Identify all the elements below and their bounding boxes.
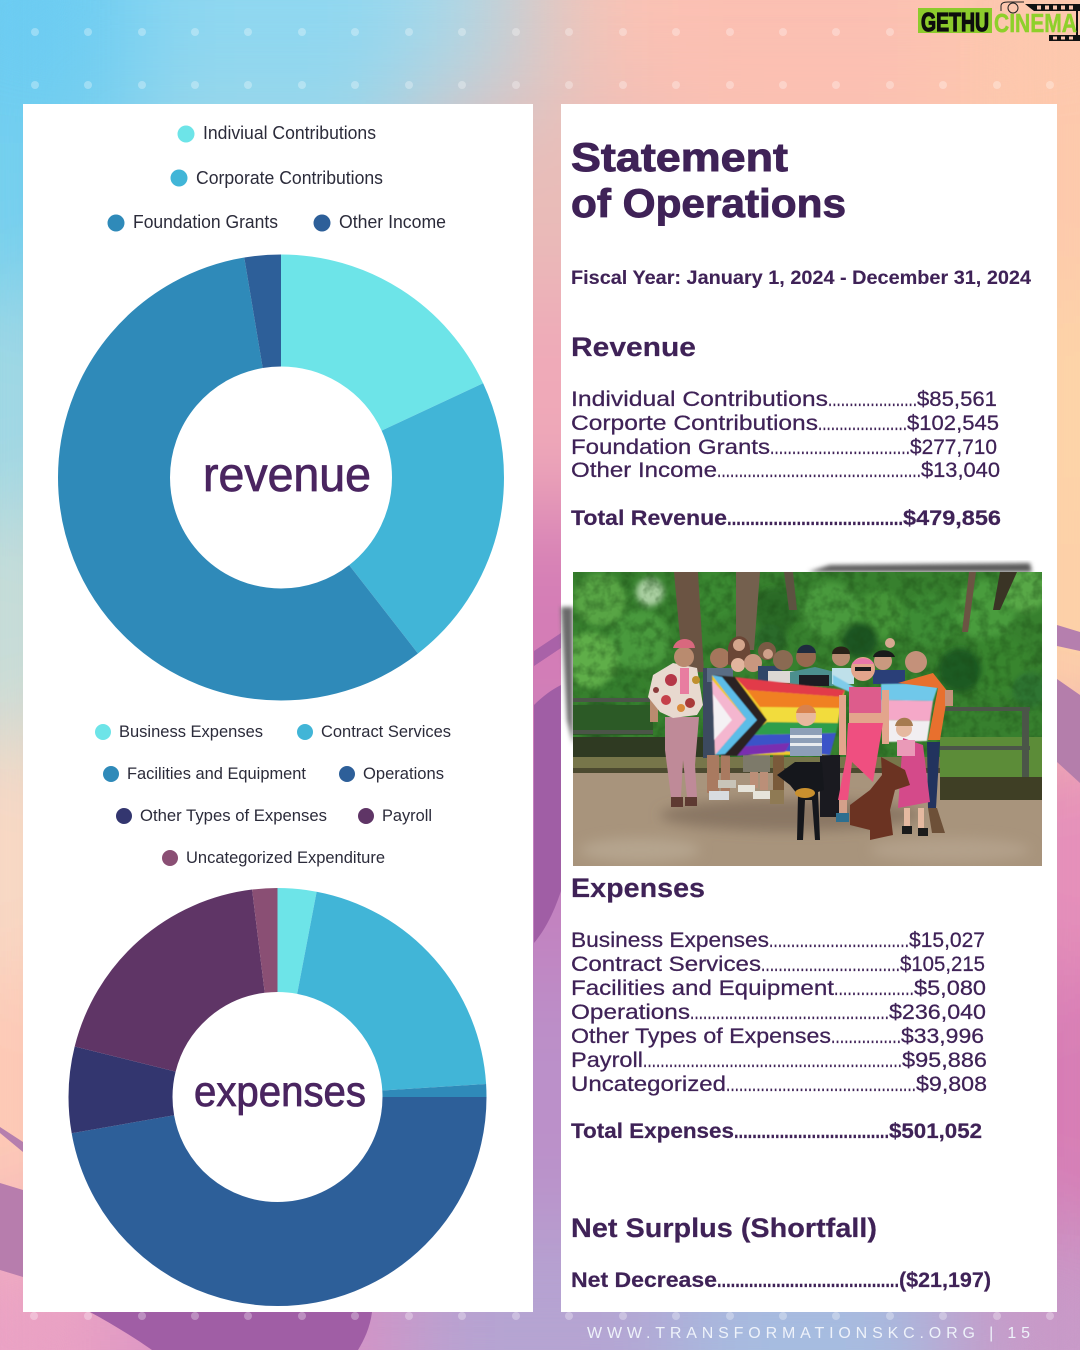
expenses rows: .............................................. (690, 1001, 889, 1024)
expenses rows: $95,886 (902, 1049, 987, 1072)
rails (573, 698, 1030, 782)
revenue legend: Other Income (339, 212, 446, 232)
revenue legend (108, 123, 446, 232)
expenses rows: Business Expenses (571, 929, 769, 952)
person: pink outfit (836, 657, 889, 822)
logo: GETHU CINEMA (918, 2, 1080, 41)
revenue rows: ..................... (818, 412, 907, 435)
expenses rows: $5,080 (914, 977, 986, 1000)
revenue heading: Revenue (571, 332, 696, 362)
panel: charts (23, 104, 533, 1312)
expenses rows: $9,808 (916, 1073, 987, 1096)
revenue legend: Indiviual Contributions (203, 123, 376, 143)
expenses rows: Payroll (571, 1049, 643, 1072)
revenue legend: Corporate Contributions (196, 168, 383, 188)
revenue donut chart (114, 310, 448, 644)
expenses rows: Other Types of Expenses (571, 1025, 831, 1048)
panel: statement of operations (561, 104, 1057, 1312)
back row people (703, 636, 905, 758)
title: of Operations (571, 182, 846, 226)
expenses legend: Business Expenses (119, 723, 263, 741)
total revenue: $479,856 (903, 507, 1001, 530)
revenue rows: $13,040 (921, 459, 1000, 482)
revenue rows: ..................... (828, 388, 917, 411)
expenses heading: Expenses (571, 873, 705, 903)
child: striped shirt (790, 705, 822, 756)
revenue rows: Corporte Contributions (571, 412, 818, 435)
net decrease: Net Decrease (571, 1269, 717, 1292)
decorative wave shapes (0, 625, 1080, 1350)
expenses rows: ............................................ (726, 1073, 916, 1096)
expenses rows: ................................ (769, 929, 909, 952)
dog: brown (850, 757, 910, 840)
expenses rows: ................ (831, 1025, 901, 1048)
revenue rows: ............................................... (717, 459, 921, 482)
net surplus heading: Net Surplus (Shortfall) (571, 1213, 877, 1243)
expenses legend: Contract Services (321, 723, 451, 741)
revenue donut chart: revenue (203, 449, 371, 502)
title (571, 136, 846, 226)
fiscal year line: Fiscal Year: January 1, 2024 - December 31, 2024 (571, 268, 1031, 289)
expenses rows: Uncategorized (571, 1073, 726, 1096)
legs behind flag (707, 754, 840, 817)
total revenue (571, 507, 1001, 530)
expenses rows: $236,040 (889, 1001, 986, 1024)
footer: website and page number: WWW.TRANSFORMATIONSKC.ORG | 15 (587, 1325, 1030, 1342)
net decrease: ........................................ (717, 1269, 899, 1292)
expenses legend: Operations (363, 765, 444, 783)
curb (573, 757, 940, 768)
photo: group with pride flags (561, 563, 1048, 866)
revenue rows (571, 388, 1000, 482)
revenue rows: Individual Contributions (571, 388, 828, 411)
total expenses: $501,052 (889, 1120, 982, 1143)
girl: pink dress (895, 718, 930, 836)
trunks (674, 572, 704, 672)
dog: black (777, 762, 824, 840)
expenses rows: $15,027 (909, 929, 985, 952)
net decrease (571, 1269, 991, 1292)
revenue rows: ................................ (770, 436, 910, 459)
expenses legend: Other Types of Expenses (140, 807, 327, 825)
expenses rows: $105,215 (900, 953, 985, 976)
revenue rows: Foundation Grants (571, 436, 770, 459)
title: Statement (571, 136, 788, 180)
net decrease: ($21,197) (899, 1269, 991, 1292)
expenses rows: .................. (834, 977, 914, 1000)
total revenue: Total Revenue (571, 507, 727, 530)
expenses legend: Uncategorized Expenditure (186, 849, 385, 867)
revenue rows: $277,710 (910, 436, 997, 459)
expenses legend: Facilities and Equipment (127, 765, 306, 783)
logo: GETHU CINEMA: GETHU (921, 7, 989, 37)
trans flag (833, 675, 939, 742)
expenses donut chart (120, 940, 434, 1254)
expenses rows: Operations (571, 1001, 690, 1024)
expenses legend (95, 723, 451, 867)
undergrowth (573, 737, 703, 757)
total expenses (571, 1120, 982, 1143)
ground (573, 773, 1042, 866)
revenue legend: Foundation Grants (133, 212, 278, 232)
person: orange shirt man (898, 651, 953, 833)
expenses rows: $33,996 (901, 1025, 984, 1048)
expenses legend: Payroll (382, 807, 432, 825)
pride flag (712, 675, 845, 756)
revenue rows: $102,545 (907, 412, 999, 435)
person: flower shirt (648, 639, 703, 807)
expenses rows: Facilities and Equipment (571, 977, 834, 1000)
expenses rows: ................................ (761, 953, 900, 976)
expenses rows: Contract Services (571, 953, 761, 976)
revenue rows: $85,561 (917, 388, 997, 411)
total revenue: ...................................... (727, 507, 903, 530)
expenses rows (571, 929, 987, 1096)
expenses donut chart: expenses (194, 1068, 366, 1116)
revenue rows: Other Income (571, 459, 717, 482)
total expenses: .................................. (734, 1120, 889, 1143)
expenses rows: ............................................................ (643, 1049, 902, 1072)
total expenses: Total Expenses (571, 1120, 734, 1143)
